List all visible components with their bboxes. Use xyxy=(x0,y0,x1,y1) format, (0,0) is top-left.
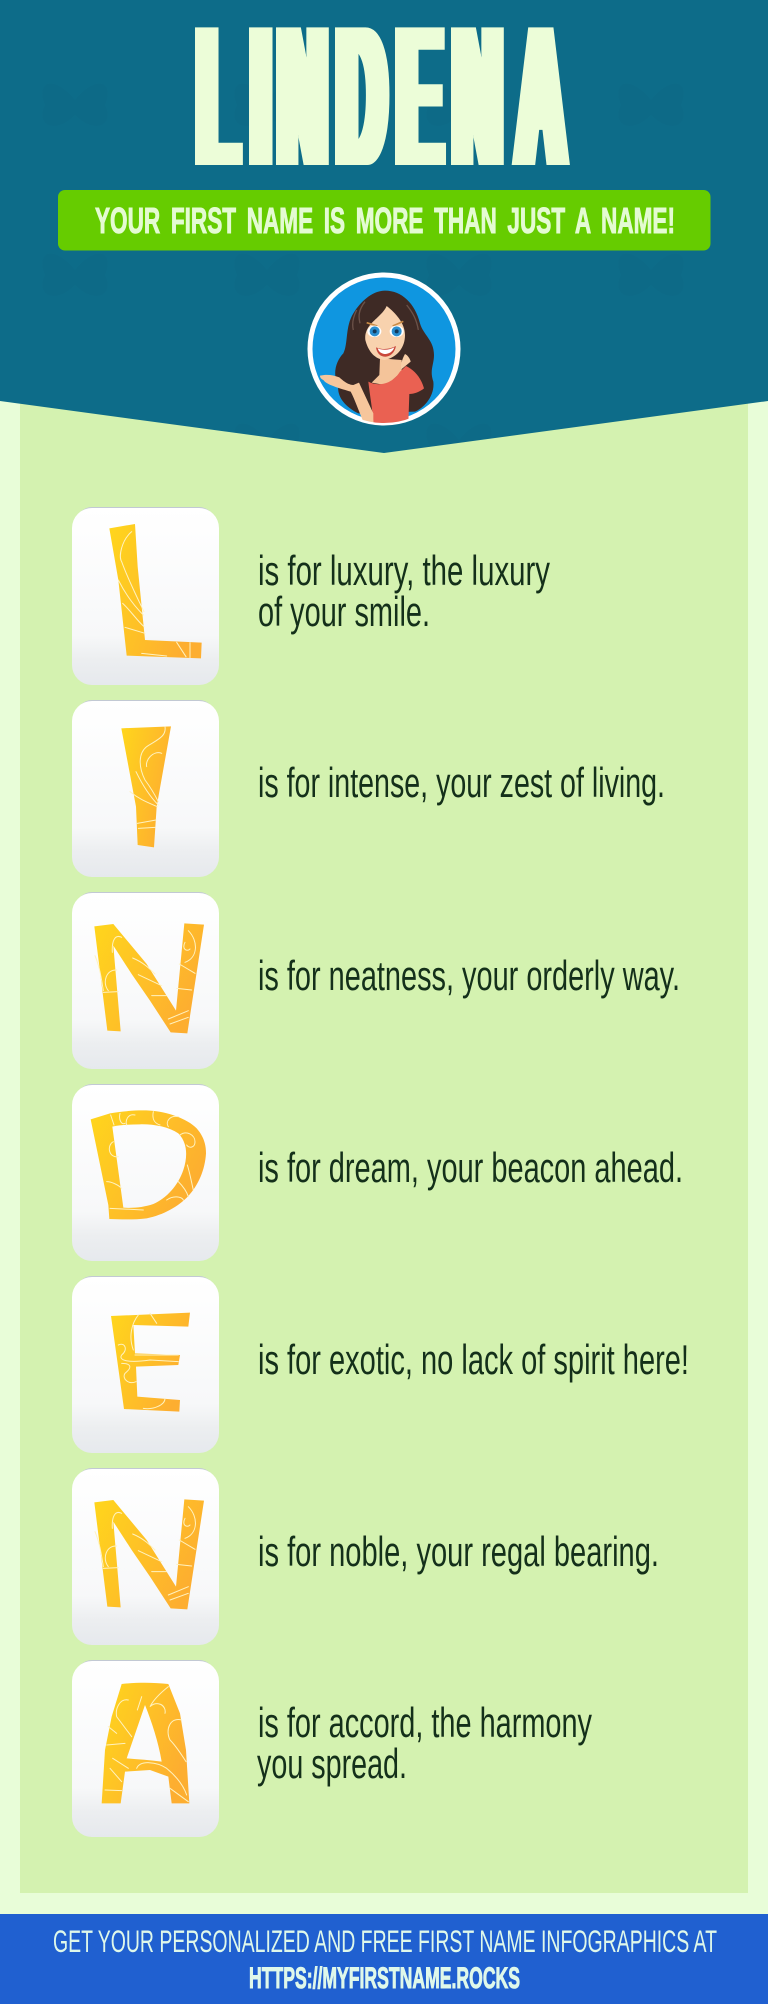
card xyxy=(72,1660,219,1837)
card xyxy=(72,700,219,877)
letter I xyxy=(121,726,171,847)
letter A xyxy=(102,1683,189,1803)
item: E xyxy=(72,1276,689,1453)
footer xyxy=(0,1914,768,2004)
card xyxy=(72,1276,219,1453)
footer link: HTTPS://MYFIRSTNAME.ROCKS xyxy=(249,1962,520,1995)
card xyxy=(72,892,219,1069)
card xyxy=(72,1468,219,1645)
caption: is for accord, the harmony xyxy=(258,1699,592,1746)
caption: is for luxury, the luxury xyxy=(258,547,550,594)
card xyxy=(72,1084,219,1261)
header banner xyxy=(0,0,768,453)
item: D xyxy=(72,1084,683,1261)
letter L xyxy=(109,524,202,658)
item: N xyxy=(72,1468,659,1645)
item: I xyxy=(72,700,665,877)
caption xyxy=(258,547,550,635)
item: L xyxy=(72,507,550,685)
letter D xyxy=(91,1110,206,1219)
content panel xyxy=(20,300,748,1893)
subtitle bar xyxy=(58,190,710,250)
icon: avatar portrait xyxy=(310,275,458,423)
caption: you spread. xyxy=(257,1740,407,1787)
item: N xyxy=(72,892,680,1069)
card xyxy=(72,507,219,685)
letter N xyxy=(94,1499,204,1609)
caption xyxy=(257,1699,592,1787)
item: A xyxy=(72,1660,592,1837)
letter N xyxy=(94,923,204,1033)
letter E xyxy=(111,1313,190,1412)
caption: of your smile. xyxy=(258,588,430,635)
